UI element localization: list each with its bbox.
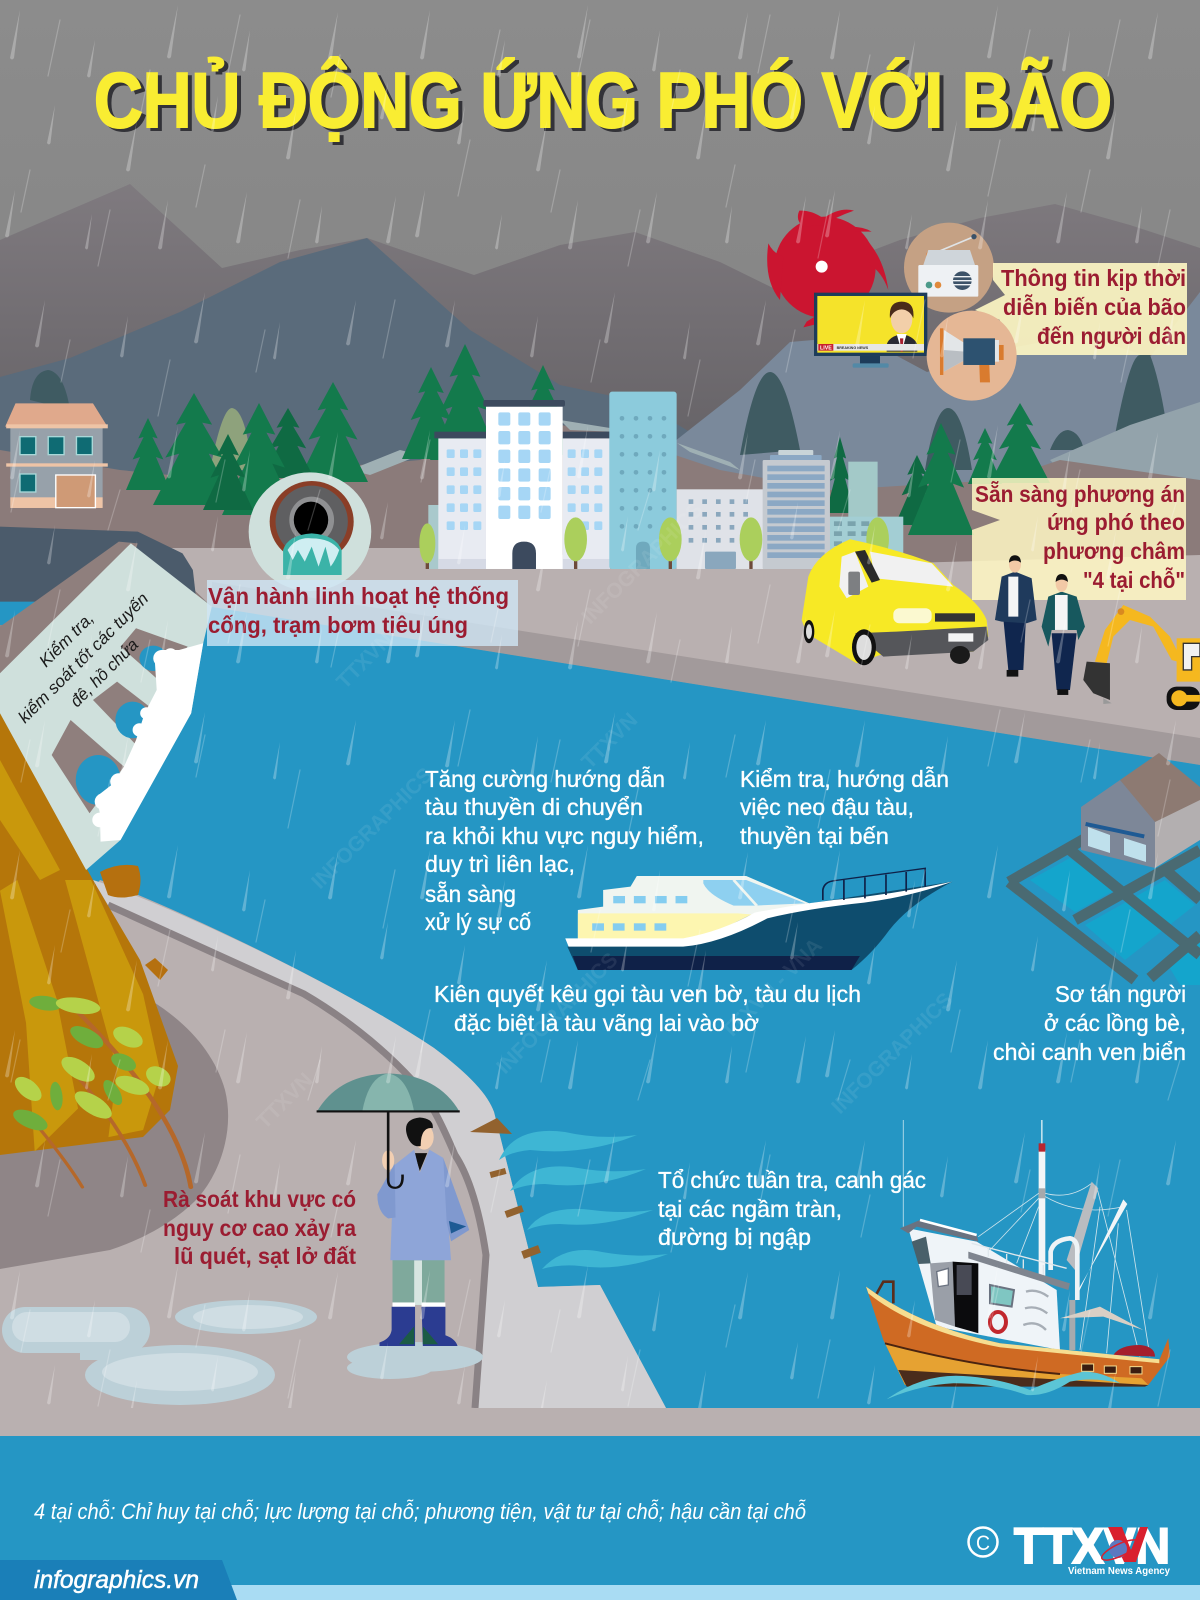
text: patrol flooded roads: Tổ chức tuần tra, canh gác [658, 1167, 926, 1193]
yellow note: 4 on-the-spot plan [972, 478, 1186, 600]
two officials [995, 555, 1085, 695]
text: call vessels ashore: Kiên quyết kêu gọi tàu ven bờ, tàu du lịch [434, 981, 861, 1007]
dark blue mountain [0, 238, 720, 540]
orange cliff [0, 713, 178, 1155]
blue note: pump stations [207, 580, 518, 646]
main curved road [0, 880, 1200, 1440]
forest behind city [402, 344, 570, 460]
left dam embankment [0, 527, 196, 673]
monitor with news anchor: BREAKING NEWS [837, 346, 869, 350]
text: review landslide areas: nguy cơ cao xảy ra [163, 1215, 356, 1241]
sea wall inner shadow line [108, 905, 486, 1408]
house [5, 403, 108, 508]
text: patrol flooded roads [658, 1167, 926, 1250]
yellow note: 4 on-the-spot plan: ứng phó theo [1047, 509, 1185, 535]
yellow note: timely information [970, 263, 1187, 355]
puddle under person [347, 1342, 483, 1379]
watermarks: INFOGRAPHICS [307, 763, 437, 894]
watermarks: TTXVN [577, 709, 642, 774]
yellow note: timely information: diễn biến của bão [1003, 293, 1186, 320]
footer panel [0, 1436, 1200, 1585]
olive rounded hill [210, 408, 252, 470]
footnote: 4 tại chỗ: Chỉ huy tại chỗ; lực lượng tại chỗ; phương tiện, vật tư tại chỗ; hậu cần tại chỗ [34, 1499, 806, 1524]
brown hills [0, 420, 1200, 600]
waves and wall stubs [470, 1118, 668, 1269]
monitor with news anchor [814, 293, 927, 368]
megaphone icon [927, 311, 1017, 401]
yellow note: timely information: Thông tin kịp thời [1001, 265, 1186, 291]
text: review landslide areas: Rà soát khu vực có [163, 1186, 356, 1212]
text: guide vessels out of danger: Tăng cường hướng dẫn [425, 766, 665, 792]
text: patrol flooded roads: đường bị ngập [658, 1224, 811, 1250]
falling rocks [100, 865, 168, 980]
watermarks: TTXVN [252, 1069, 317, 1134]
text: anchoring check [740, 766, 949, 849]
city buildings [419, 392, 903, 569]
TTXVN logo: TTXVN [1014, 1518, 1170, 1574]
watermarks: INFOGRAPHICS [492, 948, 622, 1079]
watermarks [252, 498, 957, 1134]
sky background [0, 0, 1200, 540]
blue note: pump stations: Vận hành linh hoạt hệ thống [208, 583, 509, 609]
blue note: pump stations: cống, trạm bơm tiêu úng [208, 612, 468, 638]
watermarks: INFOGRAPHICS [577, 498, 707, 629]
sea wall [93, 880, 666, 1408]
text: guide vessels out of danger [425, 766, 704, 935]
forest left [126, 382, 368, 515]
text: guide vessels out of danger: ra khỏi khu vực nguy hiểm, [425, 823, 704, 849]
text: call vessels ashore [434, 981, 861, 1036]
teal rounded peaks [30, 355, 1168, 470]
puddles [2, 1300, 317, 1405]
road darker edge [212, 582, 1200, 765]
watermarks: TTXVN - VNA [717, 934, 827, 1044]
excavator [1083, 605, 1200, 710]
text: evacuate raft dwellers: Sơ tán người [1055, 981, 1186, 1007]
fish farm raft and house [1009, 753, 1200, 985]
label: dam inspection: Kiểm tra, [35, 609, 98, 671]
yellow van [802, 539, 988, 665]
text: guide vessels out of danger: sẵn sàng [425, 880, 516, 907]
text: evacuate raft dwellers: ở các lồng bè, [1044, 1010, 1186, 1036]
yellow note: timely information: đến người dân [1037, 323, 1186, 349]
person with umbrella [317, 1074, 469, 1346]
pale hill on right [1050, 402, 1200, 520]
watermarks: INFOGRAPHICS [827, 988, 957, 1119]
text: patrol flooded roads: tại các ngầm tràn, [658, 1196, 842, 1222]
text: anchoring check: Kiểm tra, hướng dẫn [740, 766, 949, 792]
pump station icon [249, 472, 371, 591]
label: dam inspection: kiểm soát tốt các tuyến [14, 589, 152, 727]
text: guide vessels out of danger: tàu thuyền di chuyển [425, 794, 643, 820]
back mountain range [0, 184, 1200, 460]
footer tab [0, 1560, 237, 1600]
dam structure [0, 543, 212, 870]
storm typhoon icon [767, 210, 888, 327]
road [150, 548, 1200, 765]
text: anchoring check: việc neo đậu tàu, [740, 794, 914, 820]
yellow note: 4 on-the-spot plan: "4 tại chỗ" [1083, 566, 1185, 593]
cruise ship [565, 868, 952, 970]
pale hill slivers [350, 420, 740, 475]
yellow note: 4 on-the-spot plan: phương châm [1043, 538, 1185, 564]
text: evacuate raft dwellers [993, 981, 1186, 1065]
text: guide vessels out of danger: xử lý sự cố [425, 909, 531, 935]
text: anchoring check: thuyền tại bến [740, 823, 889, 849]
TTXVN logo: C [976, 1532, 990, 1555]
text: review landslide areas: lũ quét, sạt lở đất [174, 1243, 356, 1269]
text: guide vessels out of danger: duy trì liên lạc, [425, 851, 575, 877]
right grey-blue mountains [670, 292, 1200, 560]
forest right [826, 403, 1050, 535]
monitor with news anchor: LIVE [820, 345, 832, 351]
radio icon [904, 223, 994, 313]
bottom road strip [0, 1408, 1200, 1436]
watermarks: TTXVN [332, 629, 397, 694]
bent trees [9, 994, 191, 1187]
footer light strip [0, 1585, 1200, 1600]
fishing boat [866, 1120, 1170, 1399]
water [0, 607, 1200, 1436]
text: evacuate raft dwellers: chòi canh ven biển [993, 1039, 1186, 1065]
inner grey bowl [0, 1001, 228, 1269]
text: review landslide areas [163, 1186, 356, 1269]
label: dam inspection: đê, hồ chứa [66, 635, 142, 711]
website label: infographics.vn [34, 1566, 199, 1594]
TTXVN logo: Vietnam News Agency [1068, 1566, 1170, 1577]
text: call vessels ashore: đặc biệt là tàu vãng lai vào bờ [454, 1010, 759, 1036]
yellow note: 4 on-the-spot plan: Sẵn sàng phương án [975, 480, 1185, 507]
